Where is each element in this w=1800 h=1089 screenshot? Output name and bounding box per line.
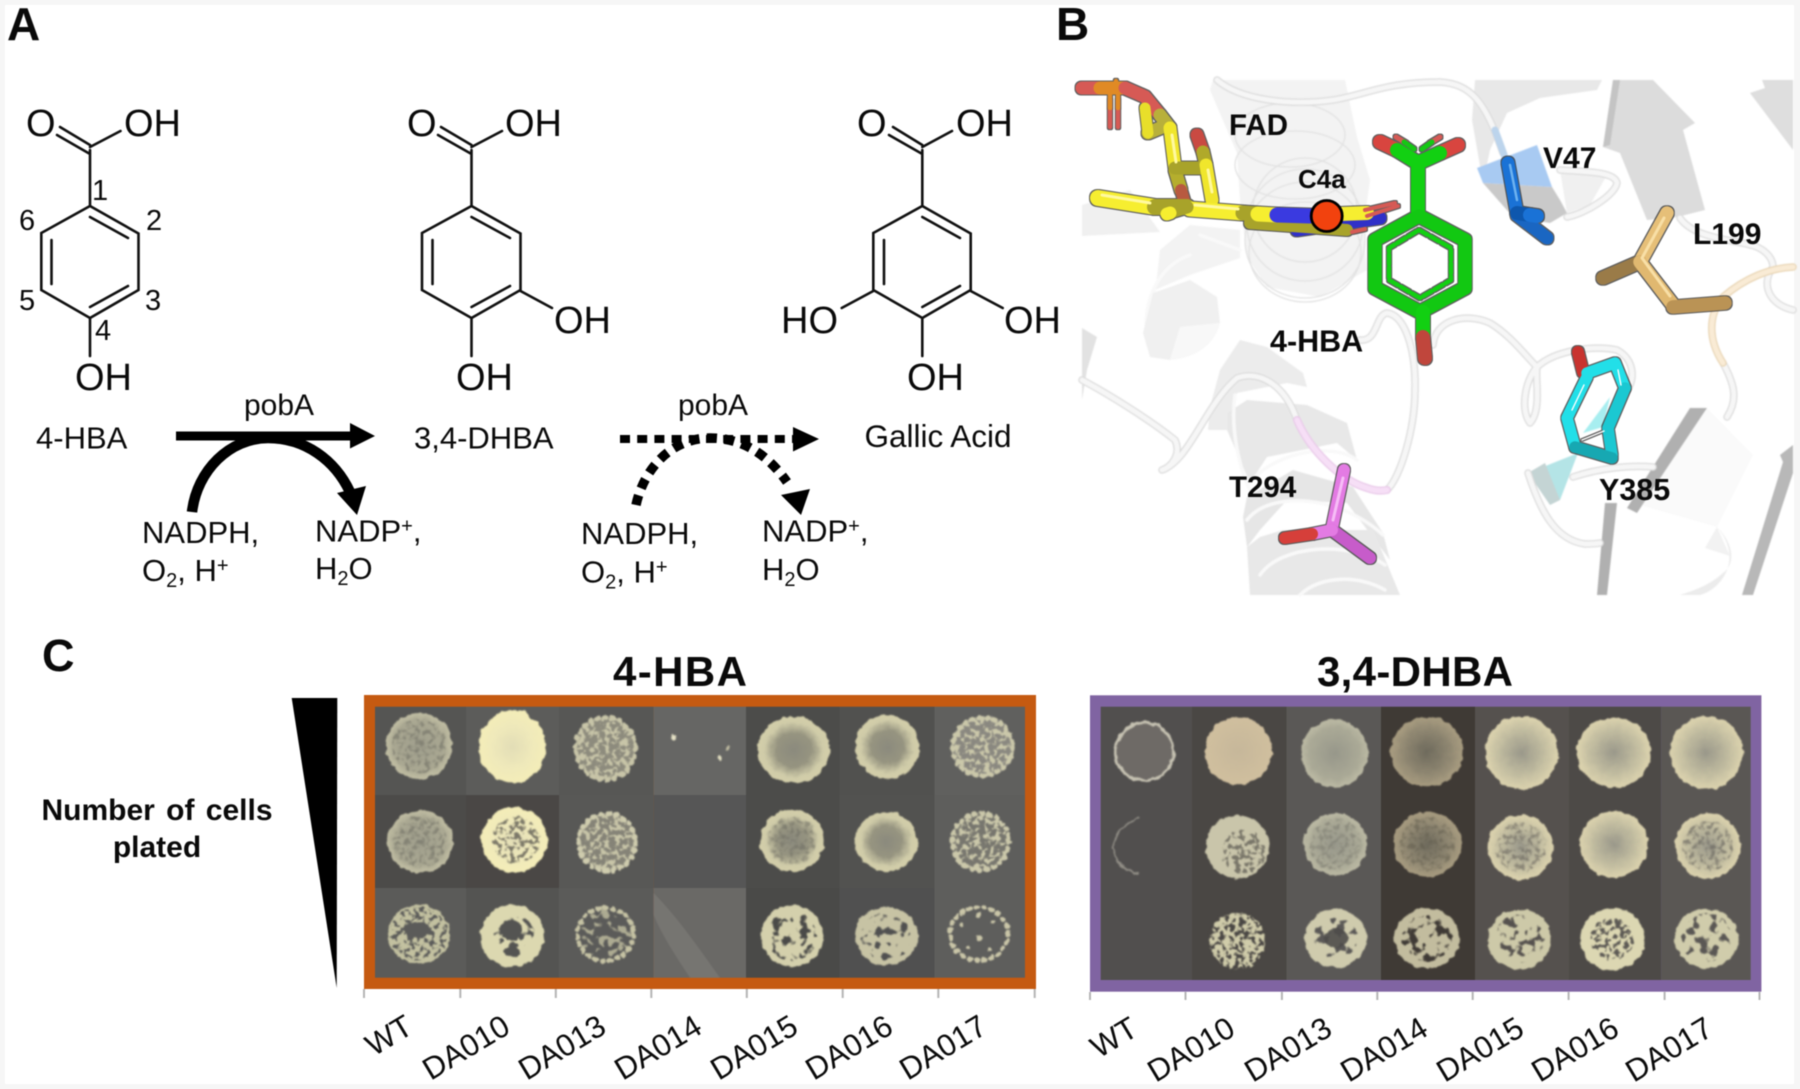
purple frame	[1090, 695, 1761, 992]
C4a marker	[1311, 200, 1342, 232]
label Y385: Y385	[1599, 473, 1670, 507]
strain labels: DA014	[608, 1008, 708, 1087]
strain labels: DA016	[799, 1008, 899, 1087]
panel A: reaction pathway	[7, 0, 1061, 594]
stick model: 4-HBA	[1375, 137, 1465, 358]
enzyme label: pobA solid: pobA	[244, 389, 314, 422]
structure: 4-HBA with numbered ring: 2	[146, 205, 162, 237]
cofactors out: NADP+, H2O (second step): 2	[784, 569, 796, 591]
strain labels: WT	[1084, 1010, 1144, 1065]
cofactors in: NADPH, O2, H+ (second step): , H	[616, 554, 656, 590]
label 4-HBA ligand: 4-HBA	[1270, 324, 1363, 358]
colony row 3	[388, 905, 1008, 967]
structure: 4-HBA with numbered ring: OH	[75, 357, 132, 399]
cofactors in: NADPH, O2, H+: NADPH,	[142, 515, 259, 550]
structure: 3,4-DHBA: OH	[456, 357, 513, 399]
structure: 4-HBA with numbered ring: 4	[95, 315, 111, 347]
axis ticks	[1090, 992, 1760, 1000]
cofactors out: NADP+, H2O (second step): ,	[860, 514, 868, 548]
strain labels: DA014	[1334, 1010, 1434, 1089]
structure: 4-HBA with numbered ring: 1	[92, 175, 108, 207]
colony row 2	[387, 807, 1011, 873]
cofactors in: NADPH, O2, H+ (second step): NADPH,	[581, 516, 698, 551]
panel C left: 4-HBA growth plate	[359, 695, 1036, 1087]
arrow: solid cofactor curve	[192, 438, 366, 515]
heading: 4-HBA plate: 4-HBA	[613, 648, 747, 695]
stick model: V47	[1508, 163, 1547, 238]
strain labels	[1084, 1010, 1719, 1089]
cofactors out: NADP+, H2O: ,	[413, 514, 421, 548]
structure: 3,4-DHBA: OH	[505, 103, 562, 145]
structure: gallic acid	[781, 103, 1061, 399]
label V47: V47	[1543, 142, 1596, 175]
ribbon loops	[1082, 80, 1793, 544]
label: gallic acid: Gallic Acid	[864, 418, 1012, 454]
structure: gallic acid: OH	[907, 357, 964, 399]
cofactors in: NADPH, O2, H+ (second step): O	[581, 554, 605, 590]
structure: 3,4-DHBA: O	[407, 103, 437, 145]
panel B: protein active site	[1082, 80, 1793, 595]
structure: 3,4-DHBA: OH	[554, 300, 611, 342]
arrow: solid 4-HBA to 3,4-DHBA	[176, 423, 375, 448]
label: 3,4-DHBA: 3,4-DHBA	[414, 420, 554, 456]
axis label: number of cells plated: Number of cells	[41, 794, 273, 827]
cofactors out: NADP+, H2O: 2	[337, 568, 349, 590]
label T294: T294	[1229, 471, 1297, 504]
protein ribbon backdrop	[1082, 80, 1793, 595]
panel letter C: C	[42, 630, 74, 681]
structure: gallic acid: OH	[1004, 300, 1061, 342]
agar background cells	[375, 707, 1025, 978]
structure: gallic acid: O	[857, 103, 887, 145]
cofactors out: NADP+, H2O (second step): NADP	[762, 514, 848, 548]
strain labels	[359, 1008, 993, 1087]
strain labels: DA010	[416, 1008, 516, 1087]
cofactors in: NADPH, O2, H+ (second step): 2	[605, 572, 616, 594]
structure: 4-HBA with numbered ring: O	[26, 103, 56, 145]
cofactors in: NADPH, O2, H+: 2	[166, 570, 177, 592]
arrow: dashed 3,4-DHBA to gallic acid	[620, 427, 819, 452]
label C4a: C4a	[1298, 164, 1346, 194]
cofactors in: NADPH, O2, H+: , H	[177, 553, 217, 588]
cofactors out: NADP+, H2O: O	[349, 551, 373, 586]
strain labels: DA016	[1525, 1010, 1625, 1089]
strain labels: DA013	[1238, 1010, 1338, 1089]
strain labels: WT	[359, 1008, 419, 1063]
strain labels: DA015	[704, 1008, 804, 1087]
cofactors out: NADP+, H2O: NADP	[315, 514, 401, 548]
heading: 3,4-DHBA plate: 3,4-DHBA	[1317, 648, 1513, 695]
structure: gallic acid: HO	[781, 300, 838, 342]
label L199: L199	[1693, 218, 1761, 251]
strain labels: DA017	[1619, 1010, 1719, 1089]
strain labels: DA015	[1430, 1010, 1530, 1089]
structure: gallic acid: OH	[956, 103, 1013, 145]
cofactors out: NADP+, H2O: H	[315, 551, 337, 586]
colony row 2	[1114, 811, 1740, 880]
axis label: number of cells plated: plated	[113, 831, 201, 864]
colony spots: WT to DA017 across three dilutions	[1114, 716, 1743, 971]
cofactors out: NADP+, H2O (second step): +	[848, 516, 860, 538]
cofactors in: NADPH, O2, H+: +	[217, 555, 229, 577]
strain labels: DA017	[893, 1008, 993, 1087]
cofactors out: NADP+, H2O (second step): O	[796, 552, 820, 587]
cofactors in: NADPH, O2, H+: O	[142, 553, 166, 588]
structure: 4-HBA with numbered ring: 5	[19, 285, 35, 317]
stick model: L199	[1603, 213, 1725, 307]
structure: 4-HBA with numbered ring	[19, 103, 181, 399]
structure: 3,4-DHBA	[407, 103, 611, 399]
agar background cells	[1101, 707, 1751, 980]
arrow: dashed cofactor curve	[636, 438, 810, 515]
wedge: decreasing cell number	[292, 698, 337, 988]
cofactors out: NADP+, H2O: +	[401, 516, 413, 538]
stick model: Y385	[1567, 352, 1625, 458]
cofactors in: NADPH, O2, H+ (second step): +	[656, 556, 668, 578]
orange frame	[364, 695, 1036, 989]
colony row 3	[1208, 908, 1738, 971]
cofactors out: NADP+, H2O (second step): H	[762, 552, 784, 587]
structure: 4-HBA with numbered ring: 6	[19, 205, 35, 237]
stick model: FAD	[1082, 81, 1398, 232]
strain labels: DA013	[512, 1008, 612, 1087]
label FAD: FAD	[1229, 109, 1288, 142]
structure: 4-HBA with numbered ring: 3	[145, 285, 161, 317]
colony spots: WT to DA017 across three dilutions	[386, 710, 1015, 967]
label: 4-HBA: 4-HBA	[36, 420, 128, 456]
axis ticks	[364, 989, 1035, 998]
enzyme label: pobA dashed: pobA	[678, 389, 748, 422]
structure: 4-HBA with numbered ring: OH	[124, 103, 181, 145]
colony row 1	[386, 710, 1015, 783]
colony row 1	[1116, 716, 1743, 789]
strain labels: DA010	[1141, 1010, 1241, 1089]
residue and ligand labels	[1229, 109, 1761, 507]
stick model: T294	[1285, 470, 1370, 558]
panel C right: 3,4-DHBA growth plate	[1084, 695, 1761, 1089]
